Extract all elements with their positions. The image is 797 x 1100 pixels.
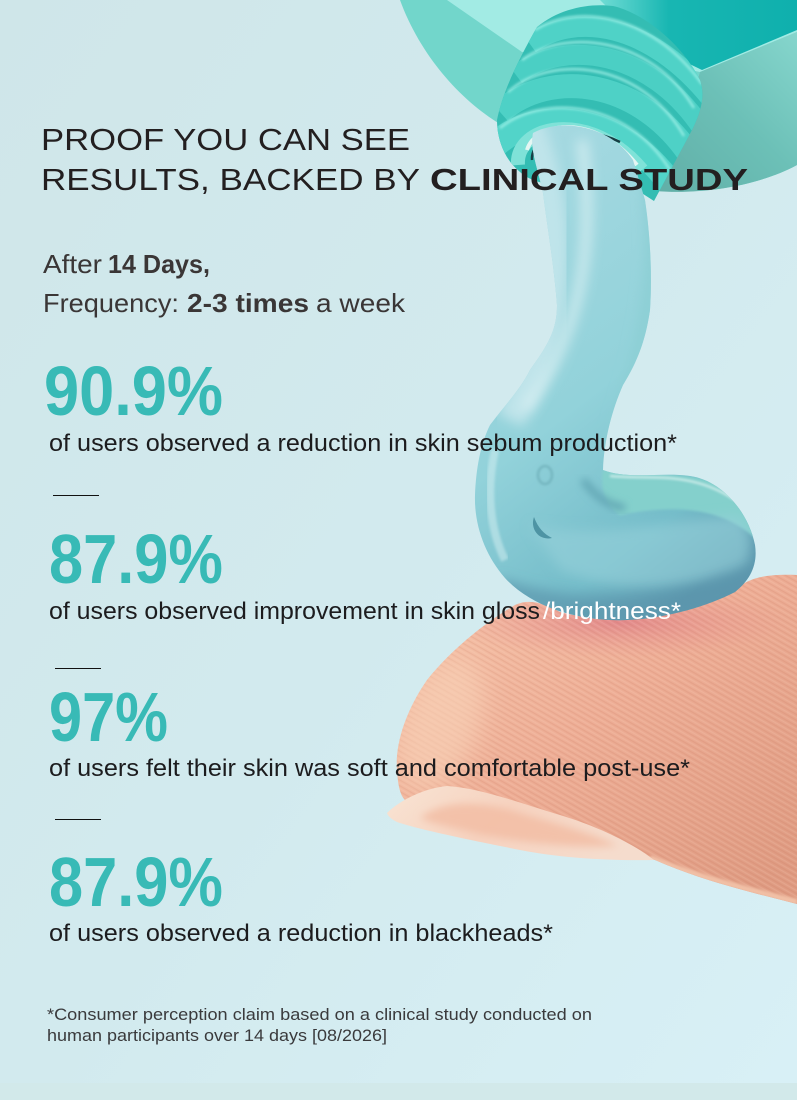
tube nozzle threads — [497, 5, 702, 201]
divider — [53, 495, 99, 496]
footnote: *Consumer perception claim based on a clinical study conducted on — [47, 1005, 592, 1024]
footer band — [0, 1083, 797, 1100]
stat: 87.9% gloss — [49, 520, 681, 625]
lower curl body — [530, 515, 751, 586]
study details: a week — [316, 288, 406, 318]
stat: 90.9% sebum: 90.9% — [44, 352, 223, 430]
stat: 90.9% sebum — [44, 352, 677, 457]
study details: Frequency: — [43, 288, 179, 318]
face mask paste — [465, 115, 765, 630]
title: RESULTS, BACKED BY — [41, 162, 420, 197]
footnote — [47, 1005, 592, 1045]
study details: 2-3 times — [187, 288, 309, 318]
stat: 87.9% gloss: /brightness* — [543, 598, 681, 625]
tube shoulder — [400, 0, 797, 192]
stat: 87.9% gloss: 87.9% — [49, 520, 223, 598]
title: PROOF YOU CAN SEE — [41, 122, 410, 157]
study details: After — [43, 249, 102, 279]
footnote: human participants over 14 days [08/2026] — [47, 1026, 387, 1045]
dimples — [533, 517, 552, 538]
title — [41, 122, 748, 197]
stat: 87.9% blackheads: 87.9% — [49, 843, 223, 921]
divider — [55, 819, 101, 820]
stat: 97% soft: 97% — [49, 678, 168, 756]
stat: 97% soft — [49, 678, 690, 782]
study details: 14 Days, — [108, 249, 210, 279]
product illustration: tube, paste and fingertip — [380, 0, 797, 910]
upper curl band — [602, 470, 757, 540]
stat: 87.9% blackheads: of users observed a reduction in blackheads* — [49, 920, 553, 947]
stem shading — [510, 120, 553, 420]
divider — [55, 668, 101, 669]
study details — [43, 249, 406, 318]
stat: 87.9% gloss: of users observed improvement in skin gloss — [49, 598, 540, 625]
fingernail — [387, 786, 654, 860]
title: CLINICAL STUDY — [430, 162, 748, 197]
stat: 87.9% blackheads — [49, 843, 553, 947]
fingertip — [380, 570, 797, 910]
stat: 97% soft: of users felt their skin was soft and comfortable post-use* — [49, 755, 690, 782]
stat: 90.9% sebum: of users observed a reduction in skin sebum production* — [49, 430, 677, 457]
